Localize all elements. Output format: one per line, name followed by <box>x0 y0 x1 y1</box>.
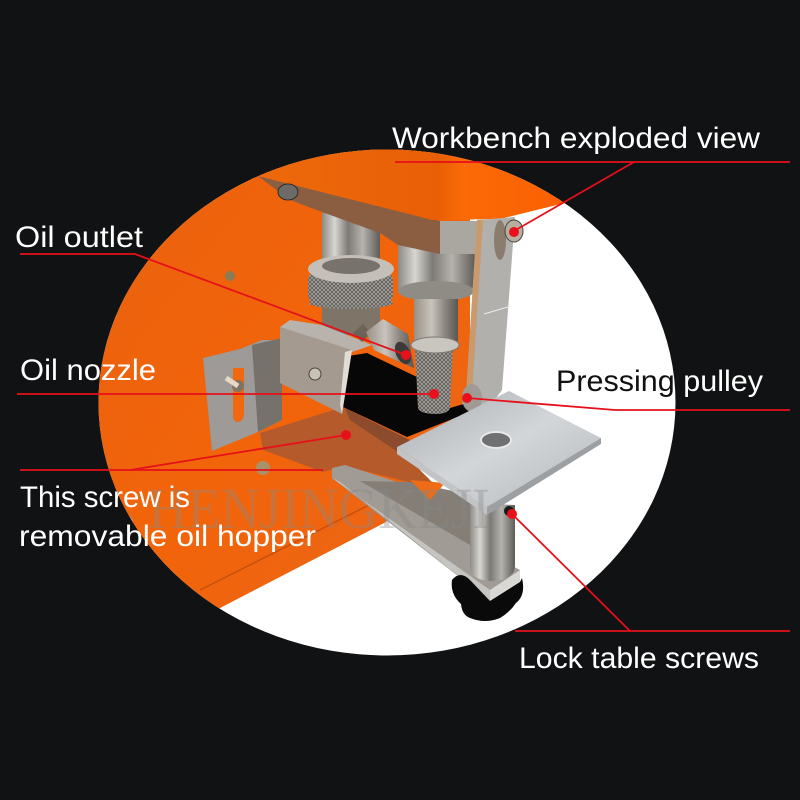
work table plate <box>397 391 601 515</box>
table lock screw <box>504 506 514 516</box>
top adjusting screw <box>494 220 523 260</box>
orange back panel <box>98 150 470 608</box>
hood screw <box>278 184 298 200</box>
watermark: HENJINGKEJI <box>148 476 490 541</box>
neck <box>322 307 380 335</box>
photo circle: machine close-up <box>80 140 690 670</box>
label: removable oil hopper screw <box>19 481 316 553</box>
bar end block <box>440 221 478 254</box>
hopper <box>260 407 432 483</box>
pressing pulley <box>462 384 482 412</box>
pressing arm <box>466 217 515 410</box>
knurled nozzle barrel <box>411 337 459 414</box>
aluminium slide block <box>280 320 372 414</box>
label: removable oil hopper screw: This screw is <box>20 481 190 514</box>
rubber pad <box>342 353 470 437</box>
upper rear column <box>322 213 380 263</box>
top plate bar <box>258 176 440 254</box>
label: workbench exploded view: Workbench exploded view <box>392 122 760 155</box>
oil outlet nozzle <box>353 319 414 368</box>
label: pressing pulley: Pressing pulley <box>556 365 763 398</box>
label: lock table screws: Lock table screws <box>519 642 759 675</box>
rear big cylinder <box>398 245 475 301</box>
label: pressing pulley: Pressing pulley <box>556 365 763 398</box>
black knob <box>452 575 523 621</box>
knurled ring <box>308 255 394 309</box>
mounting bracket <box>203 338 282 451</box>
orange hood <box>258 150 564 220</box>
leader lines and dots <box>17 162 790 631</box>
label: removable oil hopper screw: removable oil hopper <box>19 520 316 553</box>
narrow shaft <box>414 299 458 349</box>
label: oil outlet: Oil outlet <box>15 221 144 254</box>
label: oil nozzle: Oil nozzle <box>20 354 156 387</box>
infographic: annotated machine workbench <box>16 126 790 668</box>
panel screws <box>127 271 270 523</box>
support column <box>470 503 515 581</box>
lower support arm <box>332 465 520 601</box>
